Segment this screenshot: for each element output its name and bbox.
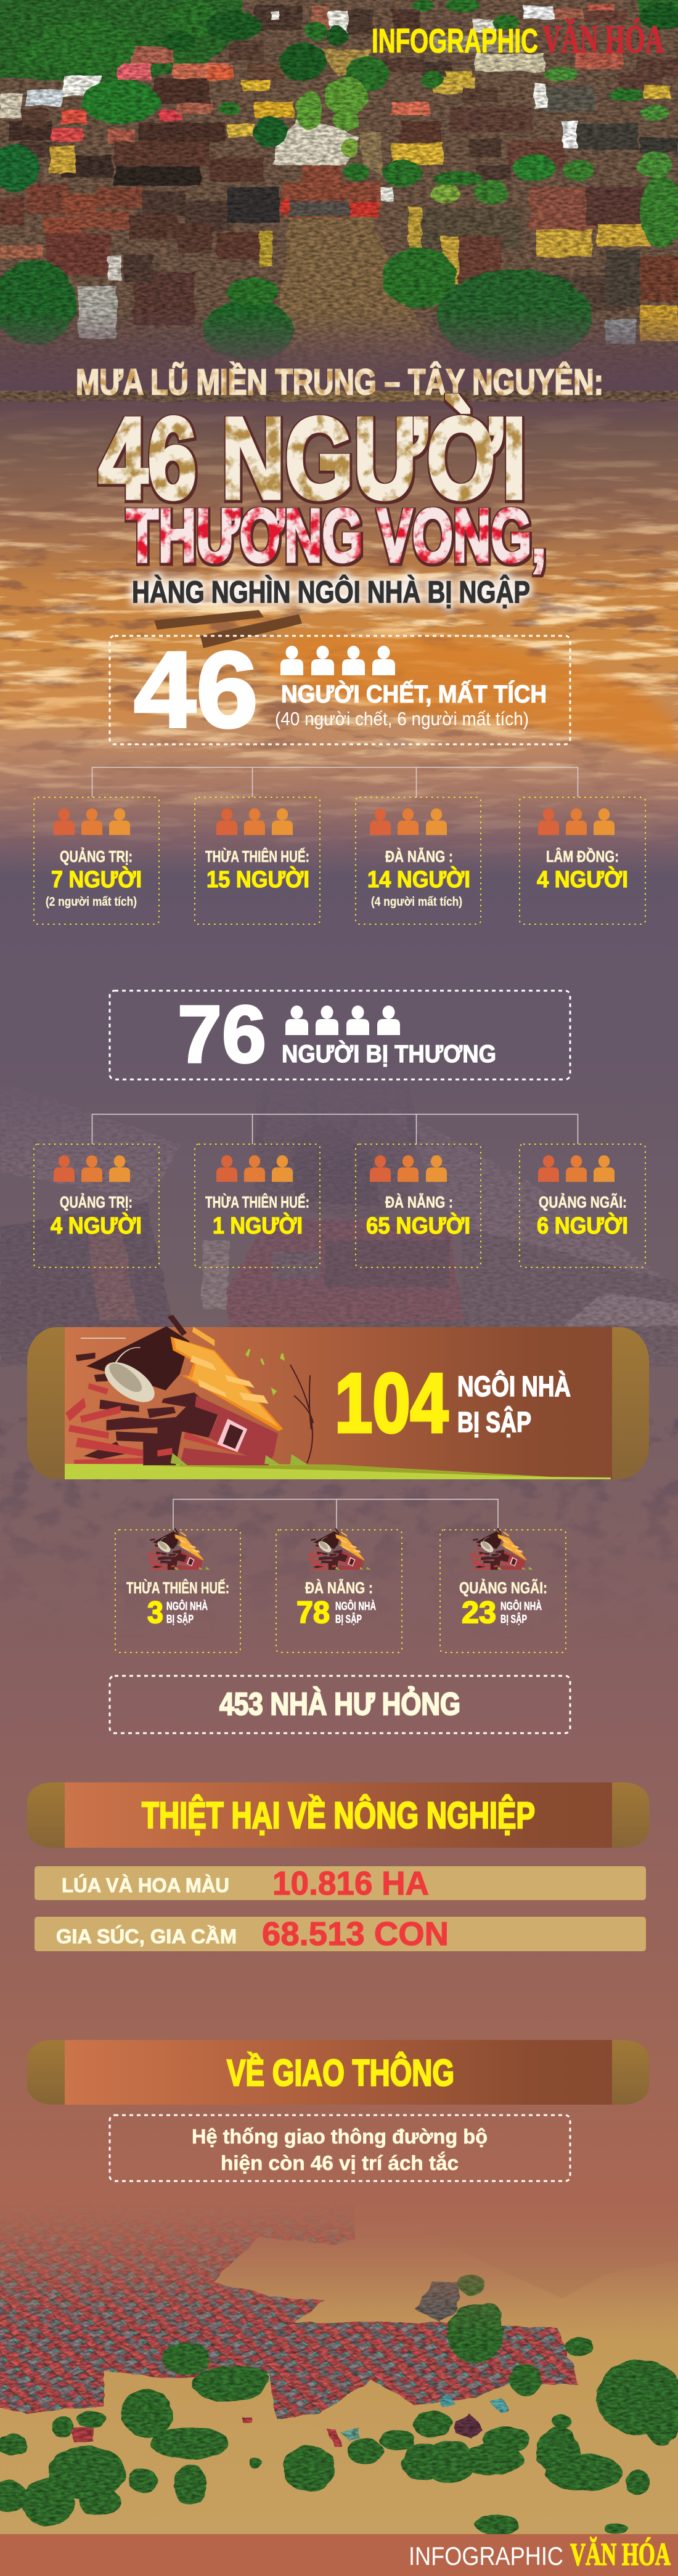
panel: Thừa Thiên Huế 1: [195, 1144, 320, 1267]
banner: agriculture heading: [27, 1782, 649, 1848]
panel: Quảng Ngãi 6: 6 NGƯỜI: [537, 1212, 628, 1239]
photo: flooded old town and Japanese bridge: [0, 0, 678, 403]
panel: Đà Nẵng 14: ĐÀ NẴNG :: [385, 847, 453, 866]
panel: Quảng Trị 7: [34, 797, 159, 924]
icon: four people white: [285, 1006, 400, 1035]
panel: Đà Nẵng 78 houses: [276, 1528, 402, 1652]
stat bar: cattle and poultry: [35, 1916, 646, 1952]
panel: Thừa Thiên Huế 1: 1 NGƯỜI: [213, 1212, 303, 1239]
panel: 76 injured: [110, 989, 570, 1079]
panel: 453 damaged houses: 453 NHÀ HƯ HỎNG: [219, 1686, 460, 1721]
connector lines: collapsed houses: [173, 1500, 498, 1530]
banner: transport heading: VỀ GIAO THÔNG: [227, 2052, 454, 2094]
panel: 76 injured: NGƯỜI BỊ THƯƠNG: [282, 1039, 496, 1068]
panel: Thừa Thiên Huế 3 houses: BỊ SẬP: [166, 1612, 194, 1625]
icon: collapsing house: [65, 1315, 308, 1466]
panel: 453 damaged houses: [110, 1676, 570, 1733]
panel: Đà Nẵng 78 houses: NGÔI NHÀ: [335, 1599, 376, 1612]
panel: transport blockages: hiện còn 46 vị trí ách tắc: [221, 2151, 459, 2174]
panel: Lâm Đồng 4: [520, 797, 645, 924]
panel: transport blockages: Hệ thống giao thông đường bộ: [192, 2125, 488, 2148]
panel: Thừa Thiên Huế 3 houses: [115, 1528, 240, 1652]
photo: muddy flood water: [0, 400, 678, 864]
panel: Quảng Ngãi 23 houses: QUẢNG NGÃI:: [459, 1579, 547, 1597]
banner: 104 houses collapsed: BỊ SẬP: [457, 1406, 531, 1438]
banner: 104 houses collapsed: 104: [335, 1356, 448, 1450]
panel: 76 injured: 76: [178, 989, 266, 1079]
banner: agriculture heading: THIỆT HẠI VỀ NÔNG NGHIỆP: [142, 1795, 535, 1836]
panel: Thừa Thiên Huế 15: THỪA THIÊN HUẾ:: [205, 847, 309, 866]
panel: Thừa Thiên Huế 15: [195, 797, 320, 924]
panel: Quảng Trị 7: QUẢNG TRỊ:: [60, 847, 133, 866]
panel: Thừa Thiên Huế 3 houses: THỪA THIÊN HUẾ:: [126, 1579, 229, 1597]
panel: Đà Nẵng 14: 14 NGƯỜI: [367, 866, 470, 893]
panel: Đà Nẵng 78 houses: BỊ SẬP: [335, 1612, 362, 1625]
ground: [65, 1464, 611, 1479]
panel: Quảng Trị 4: [34, 1144, 159, 1267]
title: houses flooded: HÀNG NGHÌN NGÔI NHÀ BỊ NGẬP: [132, 574, 530, 609]
panel: Quảng Ngãi 6: QUẢNG NGÃI:: [539, 1193, 627, 1211]
photo: excavator cleaning up street: [0, 1118, 678, 1367]
panel: Quảng Trị 7: 7 NGƯỜI: [51, 866, 142, 893]
panel: transport blockages: [110, 2115, 570, 2181]
street rubble texture: [0, 1417, 678, 1563]
title: 46 người: 46 NGƯỜI: [99, 394, 526, 522]
panel: Thừa Thiên Huế 1: THỪA THIÊN HUẾ:: [205, 1193, 309, 1211]
panel: Quảng Ngãi 6: [520, 1144, 645, 1267]
panel: Quảng Trị 4: 4 NGƯỜI: [51, 1212, 142, 1239]
stat bar: cattle and poultry: GIA SÚC, GIA CẦM: [56, 1925, 237, 1948]
panel: Lâm Đồng 4: LÂM ĐỒNG:: [546, 847, 619, 866]
icon: four people white: [280, 646, 395, 675]
panel: Quảng Ngãi 23 houses: [440, 1528, 566, 1652]
icon: leaning tree and leaves: [81, 1338, 313, 1463]
panel: Lâm Đồng 4: 4 NGƯỜI: [537, 866, 628, 893]
connector lines: dead and missing: [92, 768, 578, 797]
panel: Đà Nẵng 14: [356, 797, 481, 924]
panel: Đà Nẵng 65: 65 NGƯỜI: [366, 1212, 470, 1239]
stat bar: rice and crops: 10.816 HA: [272, 1865, 429, 1902]
panel: Thừa Thiên Huế 15: 15 NGƯỜI: [206, 866, 309, 893]
stat bar: cattle and poultry: 68.513 CON: [262, 1916, 449, 1952]
panel: Quảng Trị 4: QUẢNG TRỊ:: [60, 1193, 133, 1211]
panel: 46 dead and missing: [110, 630, 570, 750]
panel: Đà Nẵng 78 houses: 78: [296, 1595, 330, 1630]
connector lines: injured: [92, 1114, 578, 1144]
panel: Đà Nẵng 78 houses: ĐÀ NẴNG :: [305, 1579, 373, 1597]
footer band: [0, 2534, 678, 2576]
panel: Đà Nẵng 65: [356, 1144, 481, 1267]
panel: 46 dead and missing: (40 người chết, 6 người mất tích): [275, 708, 529, 729]
logo: Infographic Văn Hóa (top): INFOGRAPHIC: [372, 22, 538, 60]
stat bar: rice and crops: [35, 1865, 646, 1902]
stat bar: rice and crops: LÚA VÀ HOA MÀU: [62, 1874, 229, 1896]
panel: Thừa Thiên Huế 3 houses: NGÔI NHÀ: [166, 1599, 208, 1612]
logo: Infographic Văn Hóa (footer): [409, 2537, 671, 2572]
panel: Quảng Trị 7: (2 người mất tích): [46, 895, 137, 909]
panel: Đà Nẵng 14: (4 người mất tích): [371, 895, 462, 909]
panel: Đà Nẵng 65: ĐÀ NẴNG :: [385, 1193, 453, 1211]
photo: flooded village from above: [0, 2214, 678, 2534]
panel: Quảng Ngãi 23 houses: BỊ SẬP: [500, 1612, 527, 1625]
panel: Quảng Ngãi 23 houses: NGÔI NHÀ: [500, 1599, 542, 1612]
logo: Infographic Văn Hóa (footer): INFOGRAPHIC: [409, 2541, 563, 2570]
panel: Quảng Ngãi 23 houses: 23: [462, 1595, 496, 1630]
banner: 104 houses collapsed: NGÔI NHÀ: [457, 1370, 571, 1402]
panel: Thừa Thiên Huế 3 houses: 3: [147, 1595, 163, 1630]
panel: 46 dead and missing: 46: [134, 630, 258, 750]
panel: 46 dead and missing: NGƯỜI CHẾT, MẤT TÍCH: [281, 680, 547, 708]
banner: 104 houses collapsed: [27, 1315, 649, 1479]
banner: transport heading: [27, 2040, 649, 2105]
